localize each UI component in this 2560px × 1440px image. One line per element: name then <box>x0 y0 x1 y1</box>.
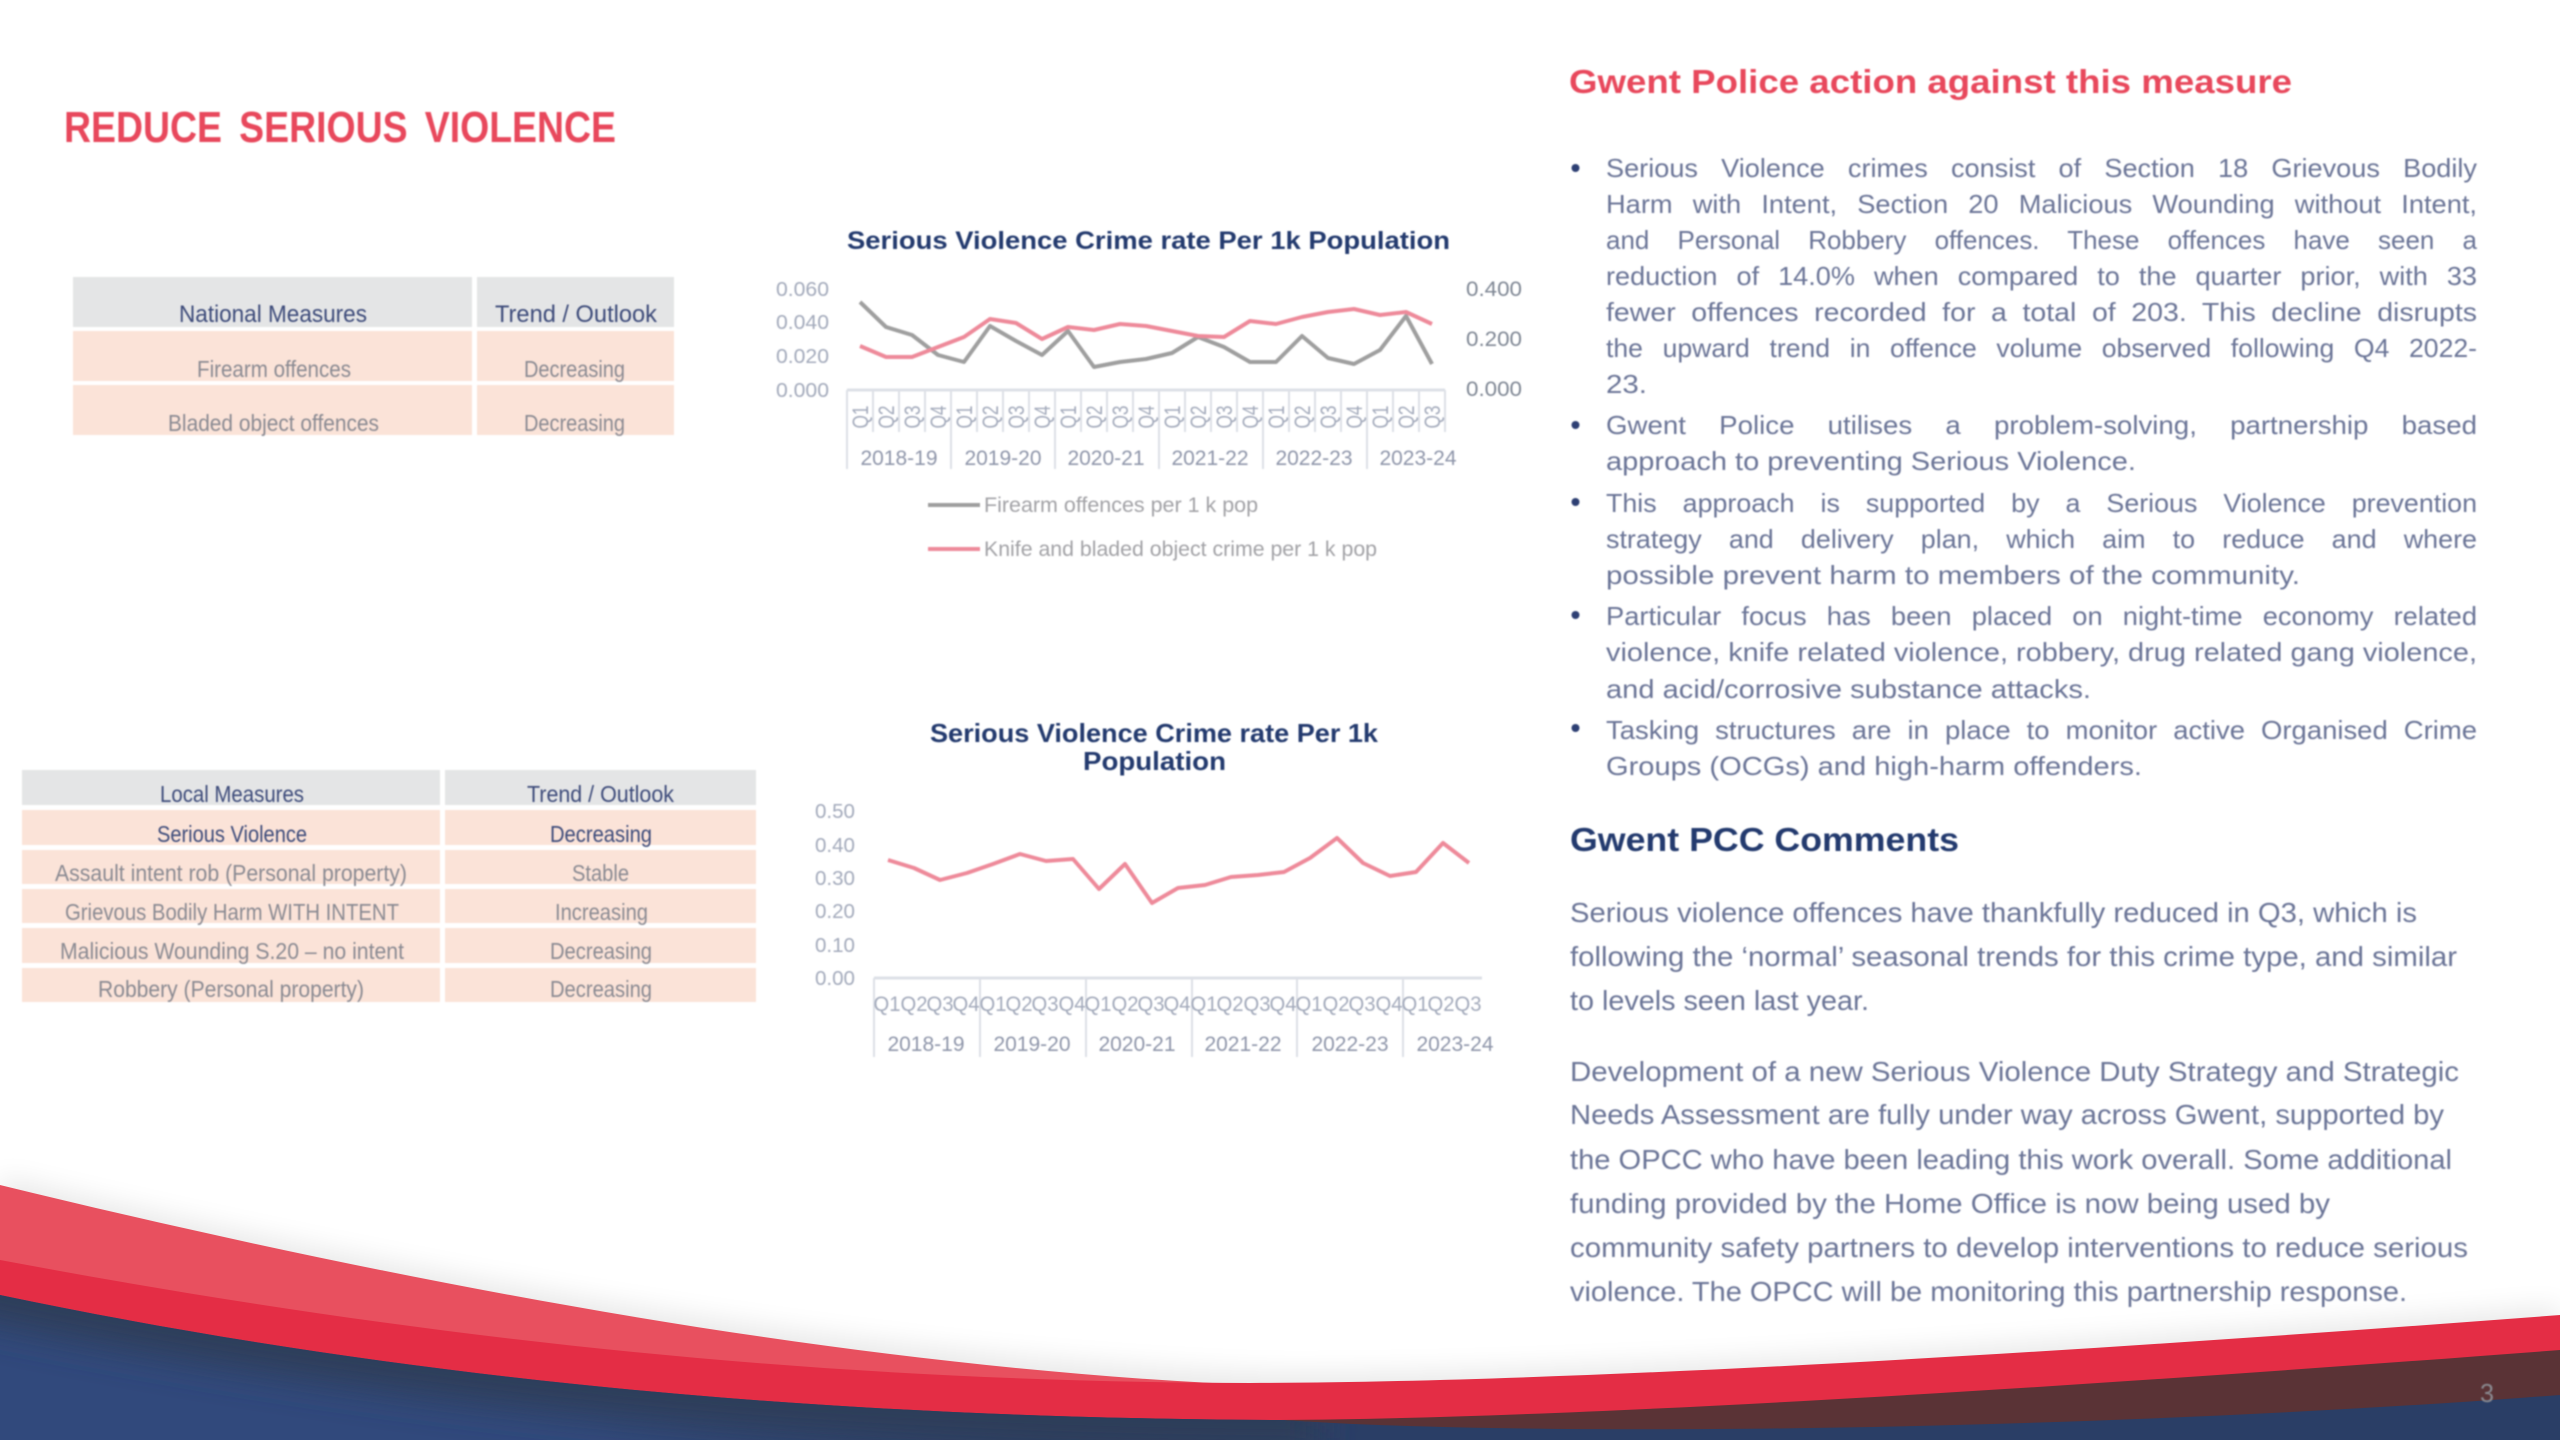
bullet 3: strategy and delivery plan, which aim to reduce and where <box>1606 524 2477 554</box>
quarter labels: Q2 <box>1186 406 1211 428</box>
series: knife and bladed object crime <box>860 309 1432 357</box>
comment paragraph 2 <box>1570 1056 2468 1307</box>
row: robbery <box>22 968 756 1002</box>
y axis labels: 0.40 <box>815 835 855 857</box>
quarter labels: Q3 <box>1212 406 1237 428</box>
bullet 4: Particular focus has been placed on night-time economy related <box>1606 601 2477 631</box>
header row <box>22 770 756 807</box>
legend: Knife and bladed object crime per 1 k pop <box>984 538 1377 561</box>
bullet 3 <box>1572 488 2477 590</box>
quarter labels: Q1 <box>1190 993 1218 1016</box>
comment paragraph 2: Development of a new Serious Violence Duty Strategy and Strategic <box>1570 1056 2459 1087</box>
year labels: 2020-21 <box>1067 447 1145 470</box>
heading: Gwent Police action: Gwent Police action against this measure <box>1569 63 2292 100</box>
row: robbery: Decreasing <box>550 976 652 1002</box>
quarter labels: Q1 <box>1264 406 1289 428</box>
row: grievous bodily harm <box>22 889 756 925</box>
bullet 2: Gwent Police utilises a problem-solving, partnership based <box>1606 410 2477 440</box>
comment paragraph 2: funding provided by the Home Office is now being used by <box>1570 1188 2330 1219</box>
quarter labels: Q3 <box>1316 406 1341 428</box>
quarter labels: Q2 <box>1112 993 1138 1016</box>
quarter labels: Q1 <box>1056 406 1081 428</box>
bullet 5: Groups (OCGs) and high-harm offenders. <box>1606 751 2142 781</box>
year labels: 2019-20 <box>964 447 1042 470</box>
quarter labels: Q3 <box>1244 993 1270 1016</box>
bullet 1: Harm with Intent, Section 20 Malicious Wounding without Intent, <box>1606 189 2477 219</box>
line chart: serious violence crime rate <box>815 718 1494 1057</box>
table: local measures <box>22 770 756 1002</box>
quarter labels: Q1 <box>952 406 977 428</box>
quarter labels: Q2 <box>1290 406 1315 428</box>
y axis labels: 0.30 <box>815 868 855 890</box>
row: firearm offences: Firearm offences <box>197 356 351 382</box>
year labels: 2022-23 <box>1275 447 1353 470</box>
row: serious violence <box>22 810 756 847</box>
quarter labels: Q4 <box>926 406 951 428</box>
row: serious violence: Decreasing <box>550 821 652 847</box>
year labels: 2022-23 <box>1311 1033 1389 1056</box>
row: assault intent rob: Assault intent rob (Personal property) <box>55 860 407 886</box>
row: grievous bodily harm: Grievous Bodily Harm WITH INTENT <box>65 899 399 925</box>
legend <box>928 494 1377 561</box>
row: firearm offences <box>73 331 674 382</box>
row: serious violence: Serious Violence <box>157 821 307 847</box>
title: REDUCE SERIOUS VIOLENCE <box>64 103 616 152</box>
comment paragraph 2: Needs Assessment are fully under way across Gwent, supported by <box>1570 1099 2444 1130</box>
bullet 4: and acid/corrosive substance attacks. <box>1606 674 2091 704</box>
quarter labels: Q1 <box>1084 993 1112 1016</box>
quarter labels: Q4 <box>1030 406 1055 428</box>
quarter labels <box>848 406 1445 428</box>
quarter labels: Q3 <box>926 993 954 1016</box>
row: malicious wounding: Decreasing <box>550 938 652 964</box>
year labels <box>860 447 1457 470</box>
left axis labels: 0.020 <box>776 346 829 368</box>
quarter labels: Q1 <box>1402 993 1428 1016</box>
axis lines <box>874 978 1482 1057</box>
bullet 4 <box>1572 601 2477 704</box>
comment paragraph 1: Serious violence offences have thankfully reduced in Q3, which is <box>1570 897 2417 928</box>
axis lines <box>847 390 1445 469</box>
right axis labels <box>1466 278 1522 401</box>
year labels: 2018-19 <box>860 447 938 470</box>
y axis labels: 0.00 <box>815 968 855 990</box>
left axis labels: 0.040 <box>776 312 829 334</box>
quarter labels: Q2 <box>1216 993 1244 1016</box>
year labels: 2019-20 <box>993 1033 1071 1056</box>
bullet 1 <box>1572 153 2478 399</box>
left axis labels <box>776 279 829 402</box>
year labels: 2018-19 <box>887 1033 965 1056</box>
row: assault intent rob: Stable <box>572 860 629 886</box>
quarter labels <box>874 993 1482 1016</box>
quarter labels: Q4 <box>1164 993 1191 1016</box>
chart title: Population <box>1083 746 1226 776</box>
quarter labels: Q2 <box>1006 993 1032 1016</box>
bullet 2 <box>1572 410 2477 476</box>
chart title: Serious Violence Crime rate Per 1k Population <box>847 227 1450 255</box>
quarter labels: Q2 <box>1428 993 1454 1016</box>
bulleted action list <box>1572 153 2478 781</box>
quarter labels: Q2 <box>1322 993 1350 1016</box>
heading: Gwent PCC Comments: Gwent PCC Comments <box>1570 821 1959 858</box>
year labels: 2023-24 <box>1379 447 1457 470</box>
bullet 1: and Personal Robbery offences. These offences have seen a <box>1606 225 2478 255</box>
quarter labels: Q4 <box>1342 406 1367 428</box>
bullet 3: possible prevent harm to members of the community. <box>1606 560 2300 590</box>
series: firearm offences <box>860 302 1432 367</box>
quarter labels: Q3 <box>1348 993 1376 1016</box>
bullet 1: 23. <box>1606 369 1647 399</box>
comment paragraph 2: the OPCC who have been leading this work overall. Some additional <box>1570 1144 2452 1175</box>
header row: Trend / Outlook <box>495 301 658 328</box>
page number: 3 <box>2480 1378 2494 1408</box>
quarter labels: Q3 <box>1108 406 1133 428</box>
row: bladed object offences <box>73 385 674 436</box>
bullet 5 <box>1572 715 2477 781</box>
row: grievous bodily harm: Increasing <box>555 899 648 925</box>
left axis labels: 0.060 <box>776 279 829 301</box>
quarter labels: Q3 <box>1138 993 1164 1016</box>
header row: Trend / Outlook <box>527 781 674 807</box>
quarter labels: Q3 <box>900 406 925 428</box>
right axis labels: 0.400 <box>1466 278 1522 301</box>
legend: Firearm offences per 1 k pop <box>984 494 1258 517</box>
comment paragraph 2: violence. The OPCC will be monitoring this partnership response. <box>1570 1276 2407 1307</box>
bullet 4: violence, knife related violence, robbery, drug related gang violence, <box>1606 637 2477 667</box>
y axis labels <box>815 801 855 990</box>
quarter labels: Q1 <box>1160 406 1185 428</box>
bullet 2: approach to preventing Serious Violence. <box>1606 446 2136 476</box>
quarter labels: Q2 <box>1394 406 1419 428</box>
bullet 1: the upward trend in offence volume observed following Q4 2022- <box>1606 333 2477 363</box>
quarter labels: Q2 <box>978 406 1003 428</box>
bullet 1: Serious Violence crimes consist of Section 18 Grievous Bodily <box>1606 153 2477 183</box>
quarter labels: Q4 <box>952 993 980 1016</box>
y axis labels: 0.20 <box>815 901 855 923</box>
quarter labels: Q3 <box>1004 406 1029 428</box>
quarter labels: Q1 <box>980 993 1006 1016</box>
header row: National Measures <box>179 301 367 328</box>
footer wave <box>0 1177 2560 1440</box>
quarter labels: Q4 <box>1238 406 1263 428</box>
quarter labels: Q4 <box>1270 993 1297 1016</box>
quarter labels: Q4 <box>1058 993 1086 1016</box>
quarter labels: Q1 <box>1368 406 1393 428</box>
comment paragraph 1: to levels seen last year. <box>1570 985 1869 1016</box>
row: malicious wounding: Malicious Wounding S.20 – no intent <box>60 938 405 964</box>
quarter labels: Q2 <box>874 406 899 428</box>
comment paragraph 1: following the ‘normal’ seasonal trends for this crime type, and similar <box>1570 941 2457 972</box>
comment paragraph 2: community safety partners to develop interventions to reduce serious <box>1570 1232 2468 1263</box>
year labels: 2021-22 <box>1204 1033 1282 1056</box>
quarter labels: Q1 <box>848 406 873 428</box>
row: assault intent rob <box>22 850 756 886</box>
bullet 5: Tasking structures are in place to monitor active Organised Crime <box>1606 715 2477 745</box>
quarter labels: Q4 <box>1376 993 1403 1016</box>
bullet 3: This approach is supported by a Serious Violence prevention <box>1606 488 2477 518</box>
quarter labels: Q4 <box>1134 406 1159 428</box>
line chart: firearm and knife crime rate <box>776 227 1522 561</box>
header row: Local Measures <box>160 781 304 807</box>
y axis labels: 0.10 <box>815 935 855 957</box>
year labels: 2020-21 <box>1098 1033 1176 1056</box>
row: malicious wounding <box>22 928 756 964</box>
year labels: 2021-22 <box>1171 447 1249 470</box>
year labels <box>887 1033 1494 1056</box>
bullet 1: fewer offences recorded for a total of 203. This decline disrupts <box>1606 297 2477 327</box>
bullet 1: reduction of 14.0% when compared to the quarter prior, with 33 <box>1606 261 2477 291</box>
quarter labels: Q1 <box>1296 993 1322 1016</box>
chart title: Serious Violence Crime rate Per 1k <box>930 718 1379 748</box>
quarter labels: Q3 <box>1454 993 1482 1016</box>
row: bladed object offences: Bladed object offences <box>168 410 379 436</box>
y axis labels: 0.50 <box>815 801 855 823</box>
quarter labels: Q2 <box>1082 406 1107 428</box>
row: firearm offences: Decreasing <box>524 356 625 382</box>
row: robbery: Robbery (Personal property) <box>98 976 364 1002</box>
row: bladed object offences: Decreasing <box>524 410 625 436</box>
quarter labels: Q1 <box>874 993 900 1016</box>
header row <box>73 277 674 328</box>
comment paragraph 1 <box>1570 897 2457 1016</box>
right axis labels: 0.000 <box>1466 378 1522 401</box>
quarter labels: Q3 <box>1032 993 1058 1016</box>
quarter labels: Q3 <box>1420 406 1445 428</box>
left axis labels: 0.000 <box>776 380 829 402</box>
table: national measures <box>73 277 674 436</box>
series: serious violence rate <box>888 838 1469 903</box>
year labels: 2023-24 <box>1416 1033 1494 1056</box>
right axis labels: 0.200 <box>1466 328 1522 351</box>
chart title <box>930 718 1379 776</box>
quarter labels: Q2 <box>900 993 928 1016</box>
